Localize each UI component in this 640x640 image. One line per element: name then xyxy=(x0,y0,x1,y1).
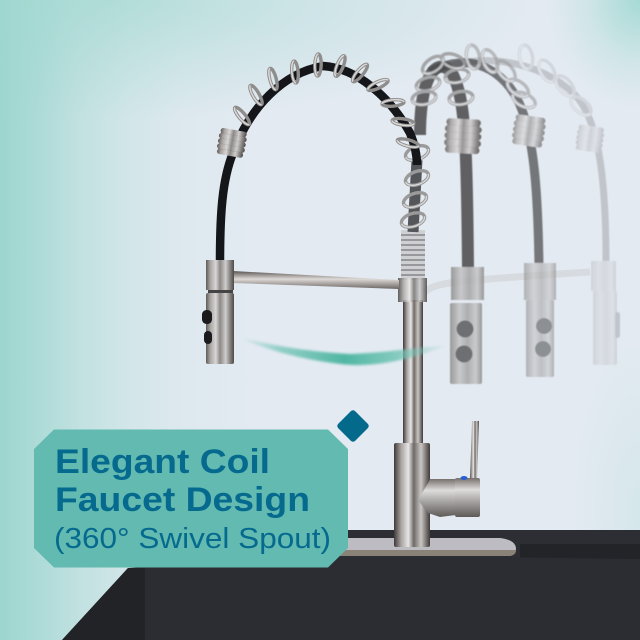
callout panel: Faucet Design xyxy=(55,481,310,519)
icon: diamond accent xyxy=(336,409,370,443)
lower spring xyxy=(400,143,430,232)
faucet base plate xyxy=(340,538,516,556)
pull-down spray head xyxy=(202,260,234,364)
mixer handle xyxy=(418,421,480,517)
main hose xyxy=(220,66,417,262)
heading: Elegant Coil xyxy=(55,443,270,481)
ghost faucet far right xyxy=(437,44,620,365)
ghost faucet near xyxy=(411,51,484,384)
teal swoosh arrow xyxy=(238,337,450,365)
counter and sink xyxy=(62,530,640,640)
callout panel xyxy=(34,430,348,568)
ghost spout bar xyxy=(424,272,590,292)
spring collar xyxy=(398,230,427,302)
subheading: (360° Swivel Spout) xyxy=(54,523,331,555)
main spring coils xyxy=(216,54,419,158)
spout bar xyxy=(233,271,399,289)
main faucet stem and body xyxy=(394,300,430,547)
ghost faucet middle xyxy=(430,44,556,377)
